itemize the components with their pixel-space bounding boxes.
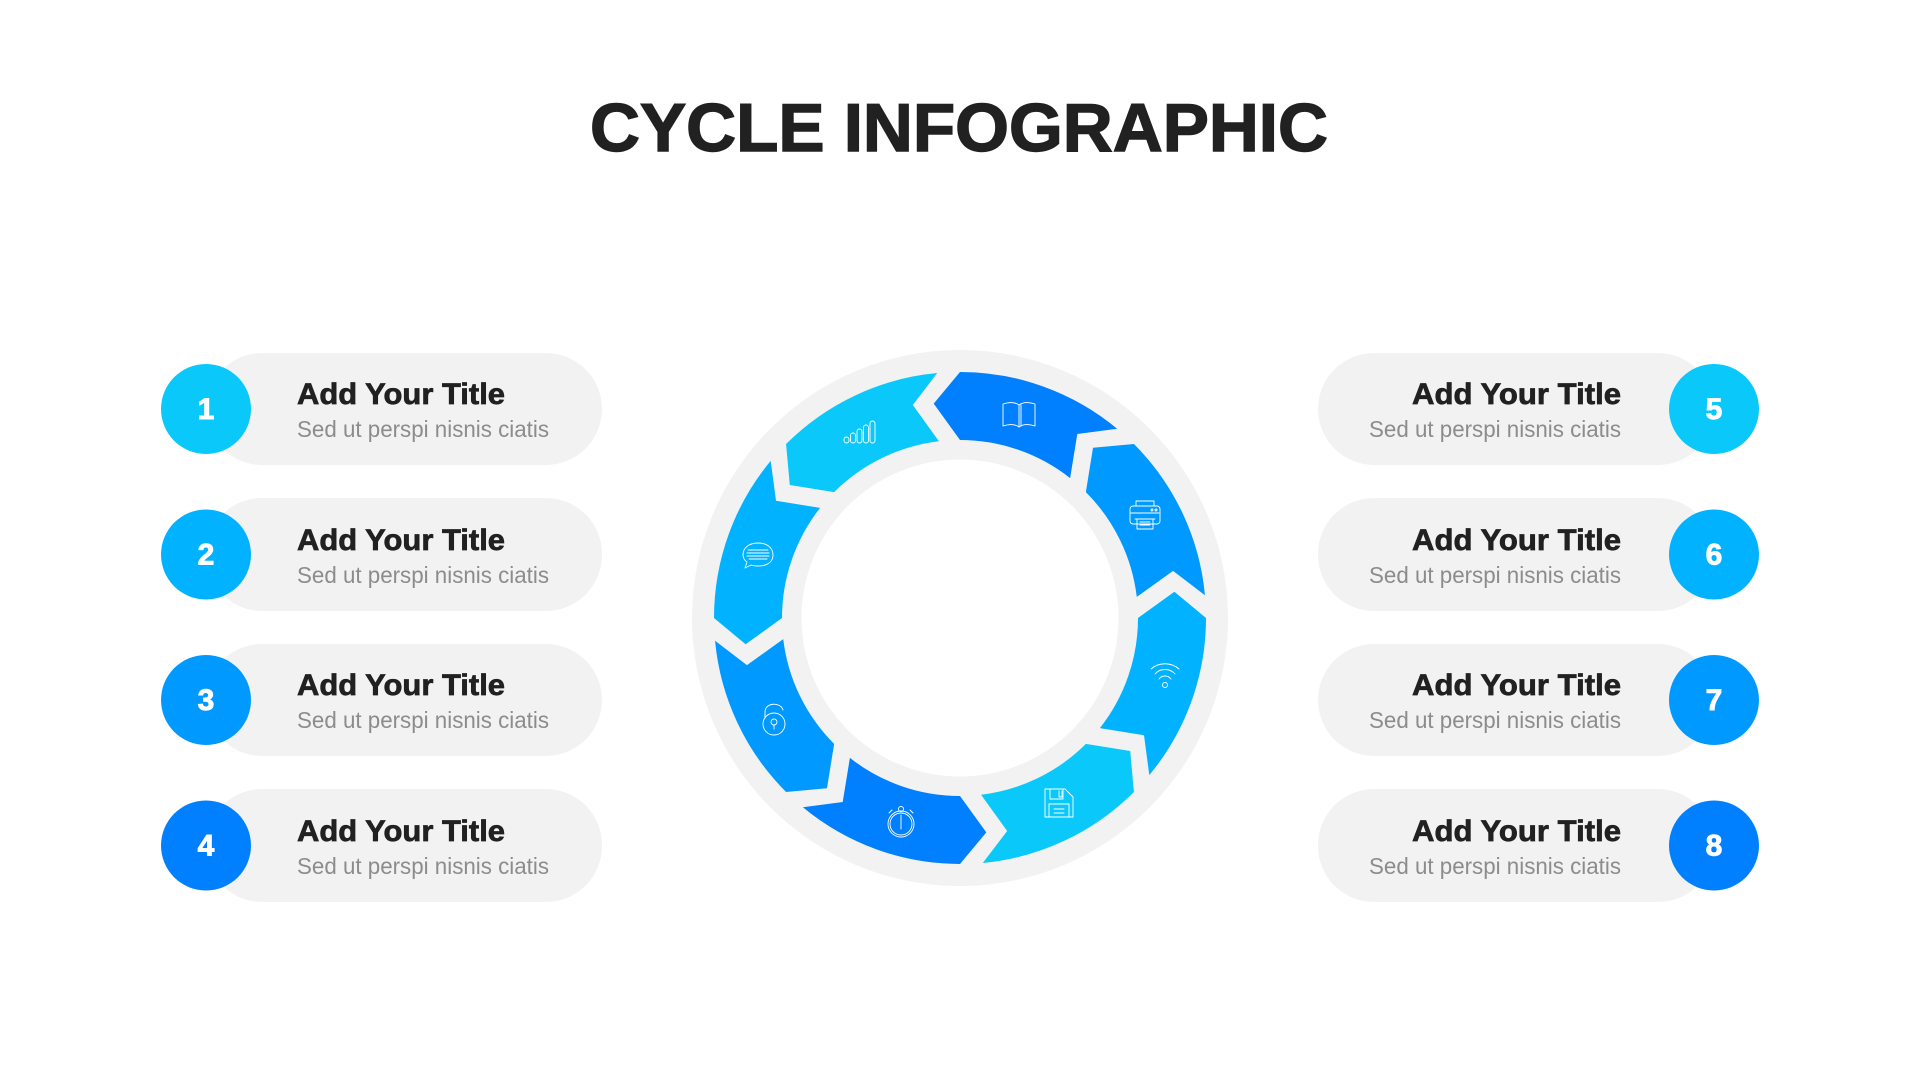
item 2: 2 [198, 538, 214, 572]
icon: floppy disk [1045, 789, 1073, 817]
item 8 [1318, 789, 1759, 902]
item 3: 3 [198, 684, 214, 717]
item 1: Sed ut perspi nisnis ciatis [297, 416, 549, 442]
item 1: Add Your Title [297, 378, 505, 411]
item 2: Sed ut perspi nisnis ciatis [297, 562, 549, 588]
item 1 [161, 353, 602, 465]
item 6: Sed ut perspi nisnis ciatis [1369, 562, 1621, 588]
item 1: 1 [198, 393, 214, 426]
icon: open padlock [763, 704, 785, 735]
item 8: 8 [1706, 830, 1722, 862]
arrow segment: floppy [948, 698, 1153, 903]
arrow segment: printer [1040, 425, 1245, 630]
ring background [692, 350, 1228, 886]
icon: wifi [1151, 664, 1179, 688]
item 6: 6 [1706, 538, 1722, 572]
title: CYCLE INFOGRAPHIC [590, 90, 1328, 166]
icon: signal bars [844, 421, 875, 443]
item 7: Sed ut perspi nisnis ciatis [1369, 707, 1621, 733]
arrow segment: wifi [1100, 592, 1206, 775]
item 5 [1318, 353, 1759, 465]
item 8: Add Your Title [1412, 815, 1621, 848]
item 7: Add Your Title [1412, 669, 1621, 702]
arrow segment: book [934, 372, 1117, 478]
item 5: Add Your Title [1412, 378, 1621, 411]
icon: chat bubble [743, 543, 773, 568]
arrow segment: signal bars [767, 333, 972, 538]
cycle diagram [675, 333, 1245, 903]
icon: open book [1003, 403, 1035, 427]
arrow segment: chat [714, 461, 820, 644]
item 2 [161, 498, 602, 611]
item 3: Sed ut perspi nisnis ciatis [297, 707, 549, 733]
item 3 [161, 644, 602, 756]
item 4: Add Your Title [297, 815, 505, 848]
item 4: 4 [198, 830, 215, 862]
icon: printer [1130, 501, 1160, 529]
item 6 [1318, 498, 1759, 611]
item 2: Add Your Title [297, 524, 505, 557]
item 4 [161, 789, 602, 902]
item 6: Add Your Title [1412, 524, 1621, 557]
item 4: Sed ut perspi nisnis ciatis [297, 853, 549, 879]
item 7: 7 [1706, 684, 1722, 717]
arrow segment: stopwatch [803, 758, 986, 864]
icon: stopwatch [888, 806, 914, 837]
item 7 [1318, 644, 1759, 756]
item 5: 5 [1706, 393, 1722, 426]
item 5: Sed ut perspi nisnis ciatis [1369, 416, 1621, 442]
arrow segment: lock [675, 606, 880, 811]
item 8: Sed ut perspi nisnis ciatis [1369, 853, 1621, 879]
item 3: Add Your Title [297, 669, 505, 702]
